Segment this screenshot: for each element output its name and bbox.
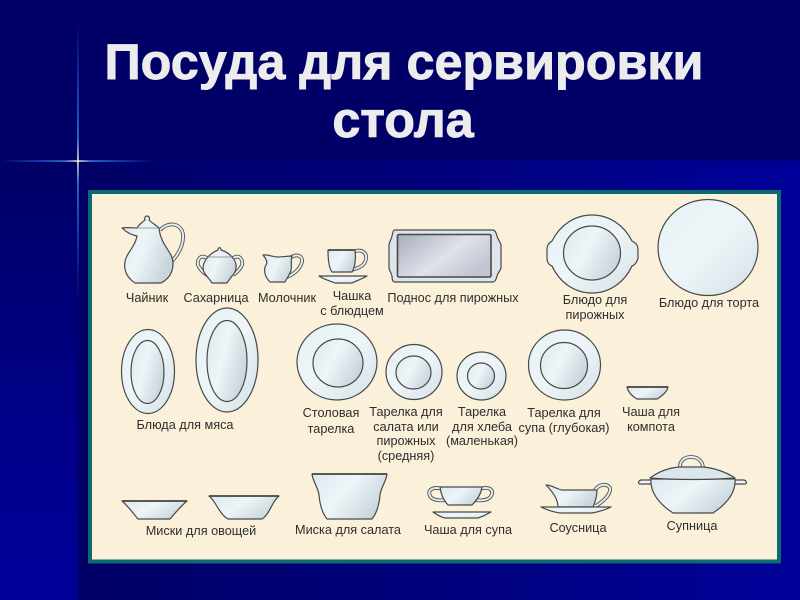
label: Тарелка для салата: салата или (373, 420, 439, 434)
label: Тарелка для супа: супа (глубокая) (519, 421, 609, 435)
label: Супница: Супница (667, 519, 718, 533)
drawings of tableware (122, 200, 758, 519)
icon: milk jug (263, 255, 302, 282)
icon: cake plate with handles (547, 215, 638, 293)
panel: tableware (90, 192, 779, 562)
label: Чаша для супа: Чаша для супа (424, 523, 513, 537)
label: Молочник: Молочник (258, 291, 316, 305)
icon: salad bowl (312, 474, 387, 519)
title: Посуда для сервировки (105, 33, 703, 90)
icon: small meat platter (122, 330, 174, 414)
icon: cake dish (658, 200, 758, 296)
label: Тарелка для салата: Тарелка для (369, 405, 443, 419)
label: Соусница: Соусница (549, 521, 607, 535)
icon: vegetable bowl large (209, 496, 279, 519)
label: Блюдо для пирожных: пирожных (566, 308, 625, 322)
label: Блюдо для пирожных: Блюдо для (563, 293, 627, 307)
label: Блюда для мяса: Блюда для мяса (136, 418, 234, 432)
icon: vegetable bowl small (122, 501, 187, 519)
label: Чашка с блюдцем: с блюдцем (320, 304, 384, 318)
labels (126, 289, 760, 538)
label: Тарелка для супа: Тарелка для (527, 406, 601, 420)
icon: soup plate (528, 330, 600, 400)
title: стола (332, 91, 475, 148)
label: Сахарница: Сахарница (183, 291, 249, 305)
icon: cake tray (389, 230, 501, 282)
icon: salad plate (386, 344, 442, 400)
icon: teapot (122, 216, 183, 283)
label: Столовая тарелка: Столовая (303, 406, 359, 420)
label: Чашка с блюдцем: Чашка (333, 289, 372, 303)
label: Тарелка для салата: пирожных (377, 434, 436, 448)
icon: sugar bowl (198, 248, 242, 283)
icon: soup cup (429, 487, 492, 518)
label: Тарелка для салата: (средняя) (378, 449, 434, 463)
label: Тарелка для хлеба: для хлеба (452, 420, 513, 434)
label: Тарелка для хлеба: (маленькая) (446, 434, 518, 448)
icon: compote bowl (627, 387, 668, 399)
label: Тарелка для хлеба: Тарелка (458, 405, 507, 419)
icon: dinner plate (297, 324, 377, 400)
label: Чаша для компота: компота (627, 420, 676, 434)
label: Столовая тарелка: тарелка (308, 422, 355, 436)
label: Чаша для компота: Чаша для (622, 405, 680, 419)
icon: bread plate (457, 352, 506, 400)
label: Миска для салата: Миска для салата (295, 523, 402, 537)
label: Блюдо для торта: Блюдо для торта (659, 296, 760, 310)
icon: cup with saucer (319, 250, 367, 283)
icon: soup tureen (639, 457, 746, 513)
label: Чайник: Чайник (126, 291, 169, 305)
icon: large meat platter (196, 308, 258, 412)
icon: gravy boat (541, 485, 611, 513)
label: Поднос для пирожных: Поднос для пирожных (387, 291, 519, 305)
label: Миски для овощей: Миски для овощей (146, 524, 256, 538)
